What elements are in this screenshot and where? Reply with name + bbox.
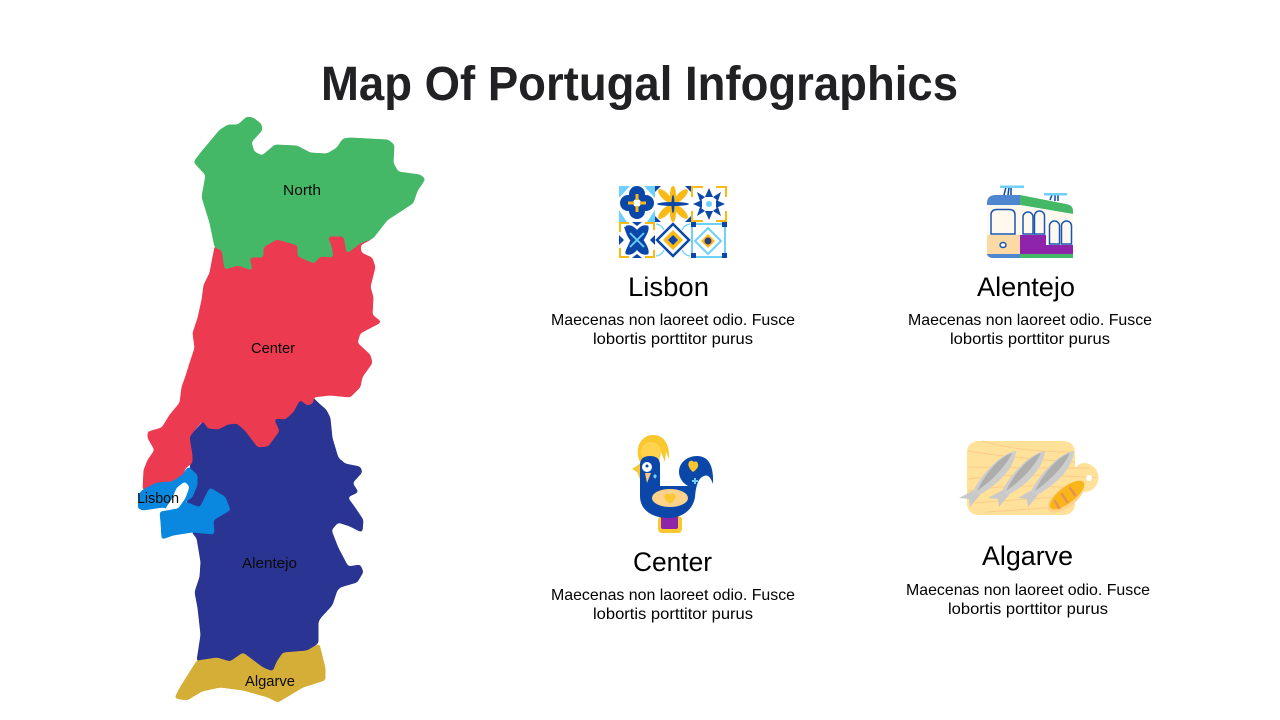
- text: Algarve description: lobortis porttitor purus: [948, 601, 1108, 618]
- icon: sardines on cutting board: [959, 441, 1098, 518]
- text: Alentejo description: lobortis porttitor purus: [950, 331, 1110, 348]
- heading: Center: Center: [633, 547, 712, 577]
- text: Lisbon description: lobortis porttitor purus: [593, 331, 753, 348]
- label: Algarve: Algarve: [245, 674, 295, 690]
- panel: Center: [551, 435, 795, 623]
- text: Lisbon description: [551, 312, 795, 348]
- region: Lisbon: [138, 467, 230, 539]
- text: Center description: [551, 587, 795, 623]
- region: North: [194, 117, 425, 270]
- title: Map Of Portugal Infographics: [321, 58, 958, 111]
- label: Alentejo: Alentejo: [242, 556, 297, 572]
- text: Lisbon description: Maecenas non laoreet odio. Fusce: [551, 312, 795, 329]
- heading: Lisbon: Lisbon: [628, 272, 709, 302]
- panel: Lisbon: [551, 186, 795, 348]
- heading: Algarve: Algarve: [982, 541, 1073, 571]
- text: Center description: Maecenas non laoreet odio. Fusce: [551, 587, 795, 604]
- text: Center description: lobortis porttitor purus: [593, 606, 753, 623]
- text: Alentejo description: [908, 312, 1152, 348]
- region: Algarve: [175, 644, 325, 702]
- text: Alentejo description: Maecenas non laoreet odio. Fusce: [908, 312, 1152, 329]
- label: Center: Center: [251, 341, 295, 357]
- text: Algarve description: [906, 582, 1150, 618]
- panel: Algarve: [906, 441, 1150, 618]
- region: Center: [143, 232, 381, 490]
- panel: Alentejo: [908, 186, 1152, 348]
- heading: Alentejo: Alentejo: [977, 272, 1075, 302]
- label: Lisbon: Lisbon: [137, 491, 179, 507]
- icon: Barcelos rooster: [632, 435, 713, 533]
- text: Algarve description: Maecenas non laoreet odio. Fusce: [906, 582, 1150, 599]
- label: North: North: [283, 183, 321, 199]
- region: Alentejo: [187, 395, 363, 672]
- map of Portugal: [137, 117, 425, 702]
- icon: azulejo tiles: [619, 186, 727, 258]
- icon: tram: [987, 186, 1073, 258]
